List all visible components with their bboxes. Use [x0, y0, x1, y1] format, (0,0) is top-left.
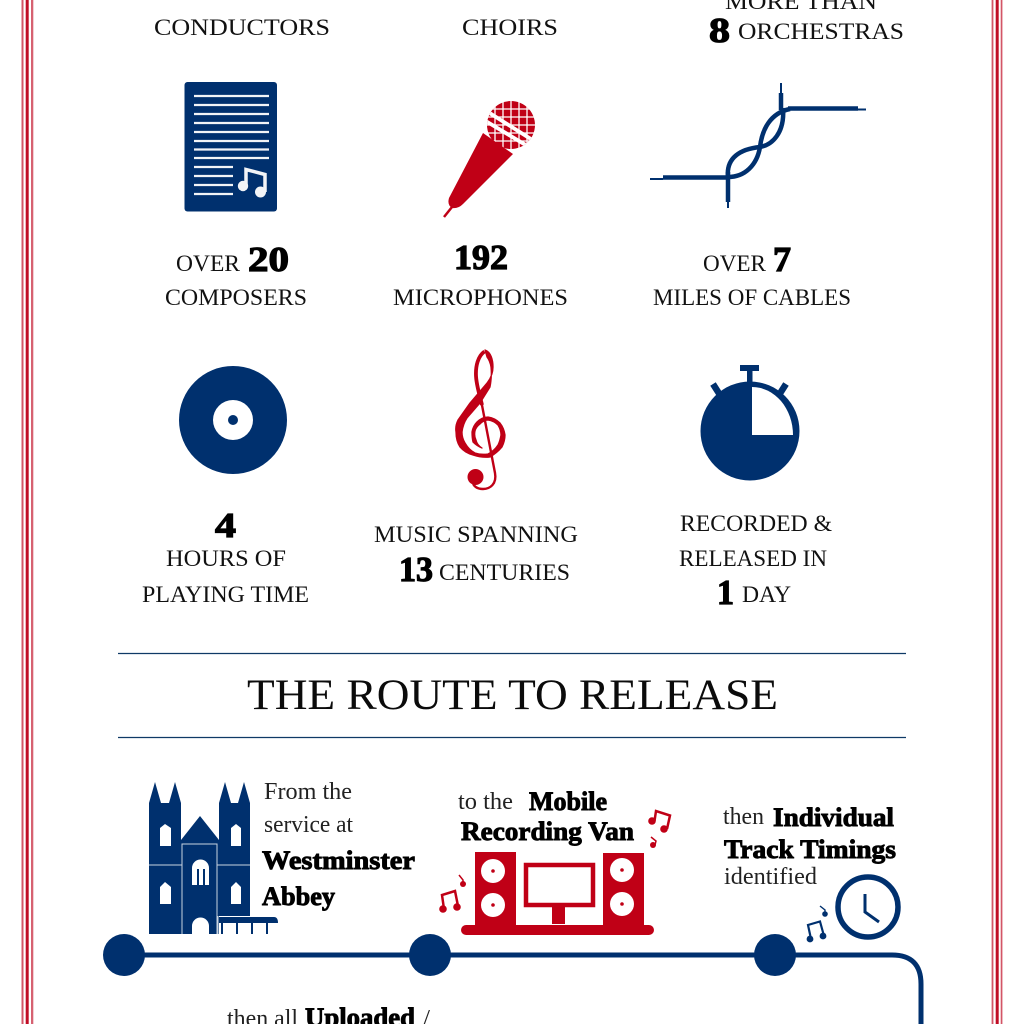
caption: music spanning 13 centuries: 13 — [399, 550, 433, 589]
text: then individual track timings identified: Track Timings — [724, 835, 896, 864]
icon: music score — [184, 82, 277, 212]
caption: music spanning 13 centuries: CENTURIES — [439, 560, 570, 585]
text: from the service at westminster abbey: Abbey — [262, 882, 335, 911]
caption: recorded and released in 1 day: 1 — [717, 573, 734, 612]
caption: over 20 composers: COMPOSERS — [165, 285, 307, 310]
caption: more than 8 orchestras — [709, 0, 904, 50]
icon: red music notes left — [439, 875, 466, 913]
text: then individual track timings identified: then — [723, 804, 764, 830]
caption: recorded and released in 1 day: RECORDED & — [680, 511, 832, 536]
text: from the service at westminster abbey: service at — [264, 812, 353, 838]
caption: 192 microphones: 192 — [454, 238, 508, 277]
caption: 4 hours of playing time: HOURS OF — [166, 546, 286, 571]
caption: over 20 composers — [165, 240, 307, 310]
caption: 4 hours of playing time — [142, 506, 309, 607]
icon: red music notes right — [648, 811, 670, 848]
text: from the service at westminster abbey: Westminster — [262, 846, 415, 875]
caption: over 7 miles of cables — [653, 240, 851, 310]
caption: over 7 miles of cables: MILES OF CABLES — [653, 285, 851, 310]
route line — [103, 934, 921, 1024]
caption: music spanning 13 centuries — [374, 522, 578, 589]
caption: conductors: CONDUCTORS — [154, 15, 330, 40]
icon: microphone — [444, 100, 536, 217]
caption: music spanning 13 centuries: MUSIC SPANNING — [374, 522, 578, 547]
caption: over 7 miles of cables: OVER — [703, 251, 767, 276]
text: then individual track timings identified — [723, 803, 896, 890]
text: then all uploaded — [227, 1003, 430, 1024]
caption: 192 microphones — [393, 238, 568, 310]
text: then individual track timings identified: identified — [724, 864, 817, 890]
icon: mixing desk and speakers — [461, 852, 654, 935]
icon: navy music notes — [807, 906, 828, 942]
icon: stopwatch — [700, 365, 800, 480]
text: to the mobile recording van: to the — [458, 789, 513, 815]
text: from the service at westminster abbey: From the — [264, 779, 352, 805]
caption: recorded and released in 1 day — [679, 511, 832, 612]
text: then individual track timings identified: Individual — [773, 803, 894, 832]
caption: over 20 composers: 20 — [248, 240, 289, 279]
text: to the mobile recording van — [458, 787, 635, 846]
icon: westminster abbey — [149, 782, 278, 934]
caption: more than 8 orchestras: 8 — [709, 11, 730, 50]
icon: clock — [838, 877, 898, 937]
heading: the route to release: THE ROUTE TO RELEASE — [247, 672, 778, 719]
caption: recorded and released in 1 day: RELEASED IN — [679, 546, 827, 571]
caption: 4 hours of playing time: 4 — [215, 506, 236, 545]
caption: over 7 miles of cables: 7 — [773, 240, 791, 279]
icon: treble clef — [456, 350, 505, 489]
caption: 192 microphones: MICROPHONES — [393, 285, 568, 310]
icon: vinyl record — [179, 366, 287, 474]
text: from the service at westminster abbey — [262, 779, 415, 911]
caption: recorded and released in 1 day: DAY — [742, 582, 791, 607]
text: to the mobile recording van: Recording Van — [461, 817, 635, 846]
text: to the mobile recording van: Mobile — [529, 787, 607, 816]
caption: 4 hours of playing time: PLAYING TIME — [142, 582, 309, 607]
caption: more than 8 orchestras: ORCHESTRAS — [738, 19, 904, 44]
caption: choirs: CHOIRS — [462, 15, 558, 40]
caption: over 20 composers: OVER — [176, 251, 241, 276]
icon: twisted cables — [650, 83, 866, 208]
